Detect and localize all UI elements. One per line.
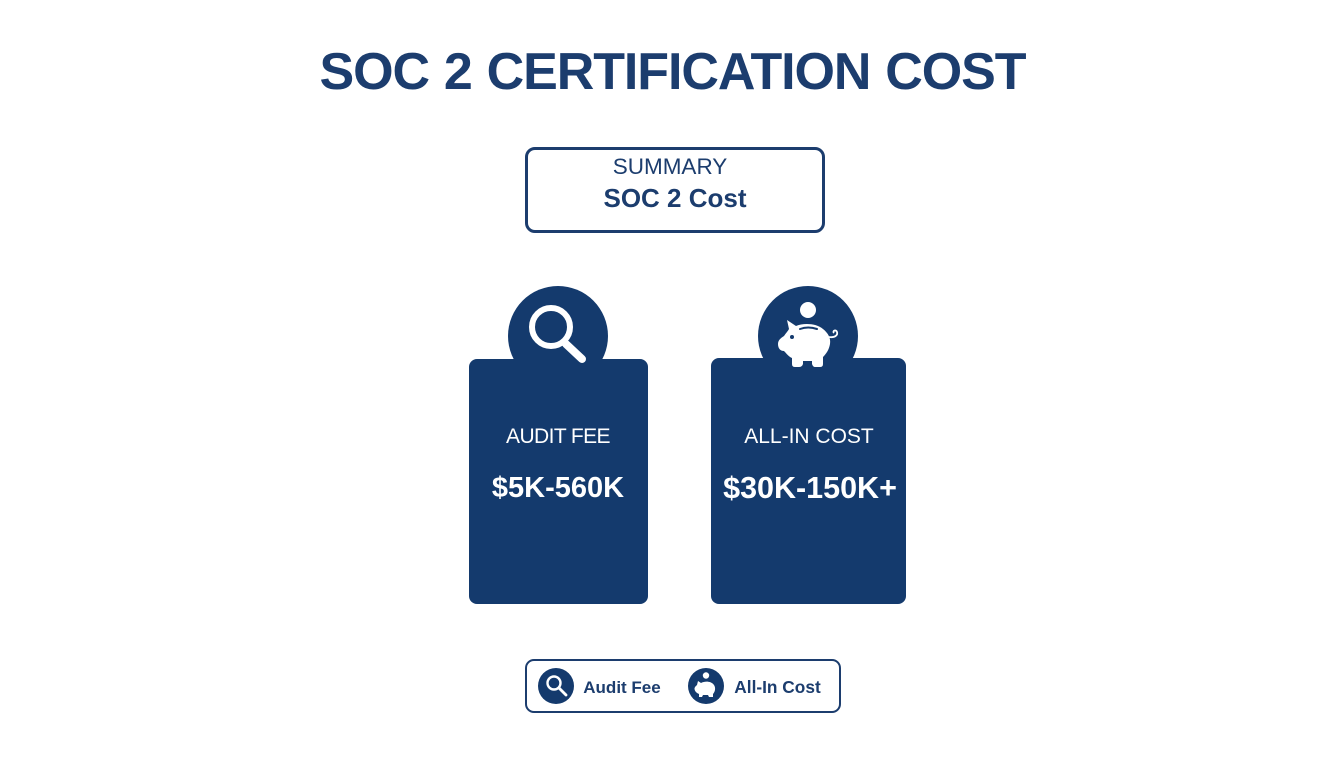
all-in label: ALL-IN COST (744, 425, 874, 448)
panel: all-in cost (711, 286, 906, 604)
legend text: audit fee: Audit Fee (583, 678, 661, 696)
all-in value: $30K-150K+ (723, 471, 897, 505)
audit fee label: AUDIT FEE (506, 425, 610, 448)
summary value: SOC 2 Cost (603, 183, 747, 213)
icon: piggy bank (778, 302, 838, 367)
icon circle: audit fee (508, 286, 608, 386)
legend icon: all-in cost (688, 668, 724, 704)
audit fee value: $5K-560K (492, 472, 624, 504)
icon: magnifying glass (529, 305, 586, 363)
legend icon: audit fee (538, 668, 574, 704)
card: all-in cost (711, 358, 906, 604)
icon circle: all-in cost (758, 286, 858, 386)
card: audit fee (469, 359, 648, 604)
summary box (525, 147, 825, 233)
legend (525, 659, 841, 713)
panel: audit fee (469, 286, 648, 604)
summary label: SUMMARY (613, 154, 727, 179)
title: SOC 2 CERTIFICATION COST (320, 43, 1025, 101)
legend text: all-in cost: All-In Cost (734, 676, 821, 696)
